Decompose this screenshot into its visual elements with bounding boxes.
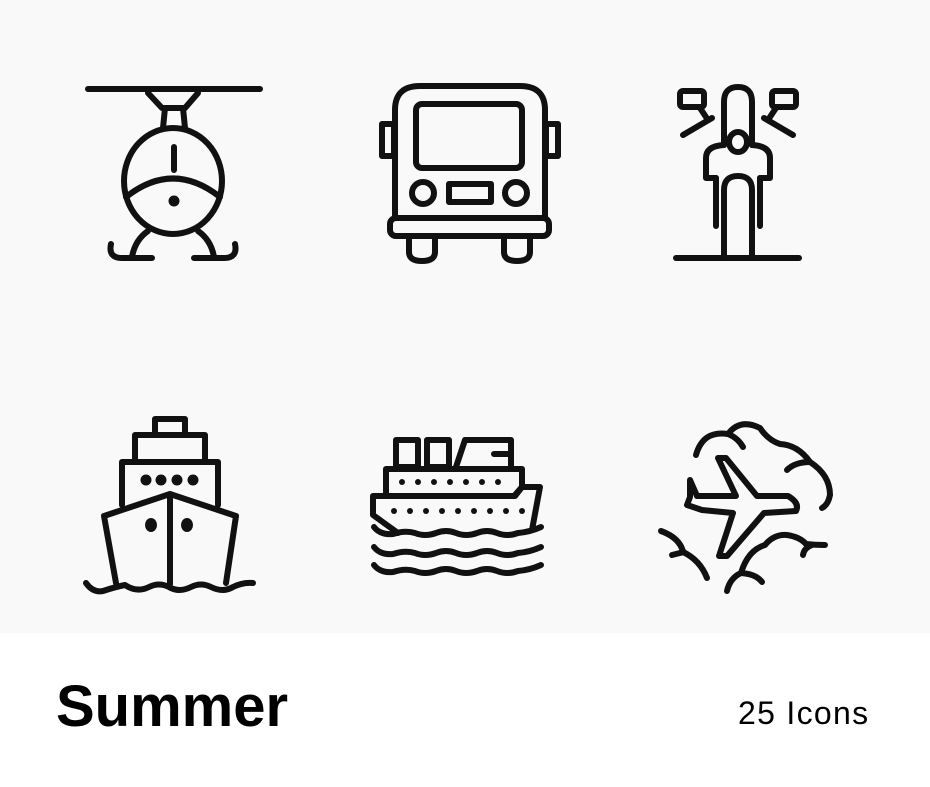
icon: bus [382,86,558,261]
icon: airplane in clouds [661,424,830,591]
subtitle: icon count: 25 Icons [738,695,869,731]
icon: ferry [373,440,541,573]
icon: helicopter [88,89,260,258]
icon: cruise ship [86,419,253,591]
icon: motorcycle [676,87,799,258]
title: Summer [56,674,288,739]
